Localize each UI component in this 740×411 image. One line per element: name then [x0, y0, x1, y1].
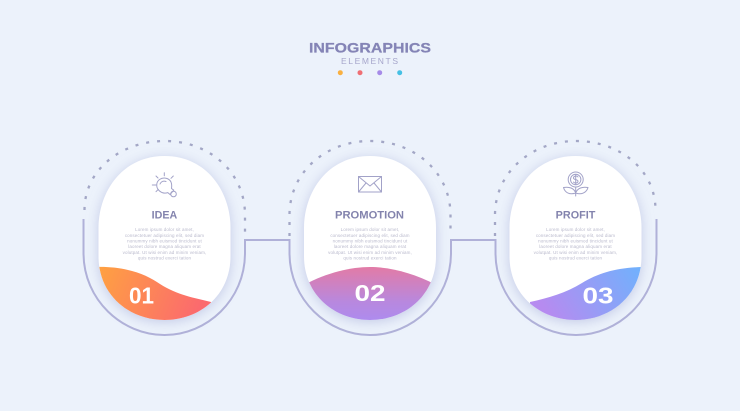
body text: nonummy nibh euismod tincidunt ut — [333, 238, 408, 244]
body text: laoreet dolore magna aliquam erat — [128, 244, 201, 249]
body text: Lorem ipsum dolor sit amet, — [135, 227, 194, 232]
purple wave — [309, 267, 431, 320]
body text: nonummy nibh euismod tincidunt ut — [127, 238, 203, 244]
card — [304, 156, 436, 320]
number 02: 02 — [354, 280, 386, 306]
icon: envelope — [358, 176, 382, 192]
panel: promotion — [300, 156, 440, 325]
heading: promotion: PROMOTION — [335, 210, 404, 222]
body text: laoreet dolore magna aliquam erat — [334, 244, 407, 249]
connecting line — [84, 219, 656, 335]
icon: money plant — [564, 172, 588, 196]
dashed arc 3 — [495, 141, 656, 236]
card — [98, 156, 230, 320]
dashed arc 2 — [290, 141, 450, 236]
icon: light bulb — [152, 173, 176, 197]
number 03: 03 — [582, 282, 614, 308]
blue wave — [530, 267, 641, 320]
heading: idea: IDEA — [152, 210, 178, 222]
body text: quis nostrud exerci tation — [138, 256, 191, 260]
body text — [123, 227, 206, 260]
heading: profit: PROFIT — [556, 210, 596, 222]
body text: quis nostrud exerci tation — [549, 256, 602, 260]
body text: nonummy nibh euismod tincidunt ut — [538, 238, 614, 244]
body text: volutpat. Ut wisi enim ad minim veniam, — [328, 250, 412, 255]
body text: consectetuer adipiscing elit, sed diam — [125, 233, 204, 238]
panel: idea — [95, 156, 230, 325]
title: INFOGRAPHICS — [309, 40, 431, 56]
number 01: 01 — [129, 282, 154, 308]
title block — [309, 40, 431, 75]
body text: volutpat. Ut wisi enim ad minim veniam, — [123, 250, 206, 255]
panel: profit — [510, 156, 646, 325]
body text: volutpat. Ut wisi enim ad minim veniam, — [534, 250, 617, 255]
body text: Lorem ipsum dolor sit amet, — [546, 227, 605, 232]
body text — [534, 227, 617, 260]
colour dots — [338, 70, 402, 75]
subtitle: ELEMENTS — [341, 56, 398, 66]
body text: Lorem ipsum dolor sit amet, — [341, 227, 399, 232]
dashed arc 1 — [84, 141, 245, 236]
body text: quis nostrud exerci tation — [343, 256, 397, 260]
body text: consectetuer adipiscing elit, sed diam — [536, 233, 615, 238]
body text: consectetuer adipiscing elit, sed diam — [330, 233, 410, 238]
orange wave — [99, 266, 211, 320]
body text — [328, 227, 412, 260]
card — [510, 156, 642, 320]
body text: laoreet dolore magna aliquam erat — [539, 244, 612, 249]
